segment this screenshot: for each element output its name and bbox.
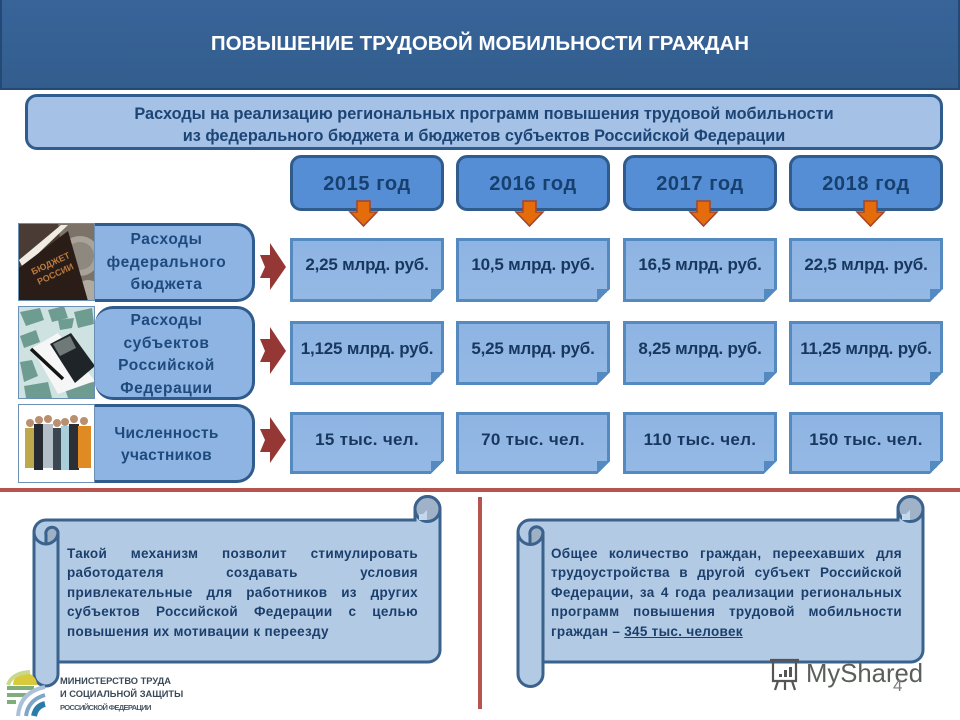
value 2016 regional xyxy=(456,321,610,385)
photo: budget book: БЮДЖЕТ xyxy=(30,250,72,277)
subtitle panel: из федерального бюджета и бюджетов субъектов Российской Федерации xyxy=(183,127,785,145)
year 2018: 2018 год xyxy=(822,173,910,195)
value 2017 federal xyxy=(623,238,777,302)
label: regional expenses: субъектов xyxy=(123,335,210,352)
down arrows xyxy=(348,200,886,227)
photo: workers xyxy=(18,404,95,483)
photo: calculator and money xyxy=(18,306,95,399)
label: regional expenses: Расходы xyxy=(131,312,202,329)
year 2015: 2015 год xyxy=(323,173,411,195)
label: participants: участников xyxy=(121,447,212,464)
value 2018 regional: 11,25 млрд. руб. xyxy=(800,339,932,358)
value 2015 regional xyxy=(290,321,444,385)
year 2015 xyxy=(290,155,444,211)
value 2018 regional xyxy=(789,321,943,385)
value 2015 federal xyxy=(290,238,444,302)
value 2016 participants: 70 тыс. чел. xyxy=(481,430,585,449)
value 2018 federal: 22,5 млрд. руб. xyxy=(804,255,928,274)
subtitle panel xyxy=(25,94,943,150)
year 2018 xyxy=(789,155,943,211)
label: participants: Численность xyxy=(114,425,219,442)
label: federal expenses xyxy=(95,223,255,302)
scroll text right: граждан – 345 тыс. человек xyxy=(551,624,743,639)
year 2016: 2016 год xyxy=(489,173,577,195)
label: federal expenses: бюджета xyxy=(130,276,203,293)
value 2015 participants: 15 тыс. чел. xyxy=(315,430,419,449)
value 2017 federal: 16,5 млрд. руб. xyxy=(638,255,762,274)
scroll shape left xyxy=(32,495,442,688)
ministry name xyxy=(60,676,183,712)
subtitle panel: Расходы на реализацию региональных программ повышения трудовой мобильности xyxy=(134,105,834,123)
icon: ministry logo xyxy=(6,670,46,717)
value 2016 federal: 10,5 млрд. руб. xyxy=(471,255,595,274)
watermark text: MyShared xyxy=(806,660,923,688)
horizontal divider xyxy=(0,488,960,492)
scroll text right: программ повышения трудовой мобильности xyxy=(551,604,902,619)
ministry name: РОССИЙСКОЙ ФЕДЕРАЦИИ xyxy=(60,703,151,712)
scroll text left: привлекательные для работников из других xyxy=(67,585,418,600)
value 2016 regional: 5,25 млрд. руб. xyxy=(471,339,595,358)
value 2018 federal xyxy=(789,238,943,302)
scroll shape right xyxy=(516,495,924,688)
value 2015 federal: 2,25 млрд. руб. xyxy=(305,255,429,274)
ministry name: И СОЦИАЛЬНОЙ ЗАЩИТЫ xyxy=(60,689,183,699)
vertical divider xyxy=(478,497,482,709)
scroll text left: субъектов Российской Федерации с целью xyxy=(67,604,418,619)
value 2018 participants xyxy=(789,412,943,474)
scroll text right: трудоустройства в другой субъект Российской xyxy=(551,565,902,580)
scroll text right: Федерации, за 4 года реализации региональных xyxy=(551,585,902,600)
ministry name: МИНИСТЕРСТВО ТРУДА xyxy=(60,676,171,686)
year 2017: 2017 год xyxy=(656,173,744,195)
scroll text left xyxy=(67,546,418,639)
year 2016 xyxy=(456,155,610,211)
photo: budget book xyxy=(18,223,95,301)
value 2017 participants xyxy=(623,412,777,474)
scroll text left: повышения их мотивации к переезду xyxy=(67,624,329,639)
photo: budget book: РОССИИ xyxy=(36,261,75,287)
value 2015 regional: 1,125 млрд. руб. xyxy=(301,339,433,358)
label: regional expenses: Российской xyxy=(118,357,215,374)
scroll text right xyxy=(551,546,902,639)
label: regional expenses: Федерации xyxy=(120,380,213,397)
scroll text right: Общее количество граждан, переехавших для xyxy=(551,546,902,561)
header band xyxy=(0,0,960,90)
value 2018 participants: 150 тыс. чел. xyxy=(809,430,923,449)
scroll text left: Такой механизм позволит стимулировать xyxy=(67,546,418,561)
icon: watermark presentation board xyxy=(770,658,799,690)
value 2016 federal xyxy=(456,238,610,302)
value 2016 participants xyxy=(456,412,610,474)
value 2017 regional xyxy=(623,321,777,385)
label: federal expenses: Расходы xyxy=(131,231,202,248)
label: participants xyxy=(95,404,255,483)
value 2015 participants xyxy=(290,412,444,474)
year 2017 xyxy=(623,155,777,211)
red row arrows xyxy=(260,243,286,463)
page number: 4 xyxy=(893,676,902,695)
label: federal expenses: федерального xyxy=(107,254,226,270)
title: ПОВЫШЕНИЕ ТРУДОВОЙ МОБИЛЬНОСТИ ГРАЖДАН xyxy=(211,32,749,55)
label: regional expenses xyxy=(95,306,255,400)
scroll text left: работодателя создавать условия xyxy=(67,565,418,580)
value 2017 regional: 8,25 млрд. руб. xyxy=(638,339,762,358)
value 2017 participants: 110 тыс. чел. xyxy=(644,430,756,449)
